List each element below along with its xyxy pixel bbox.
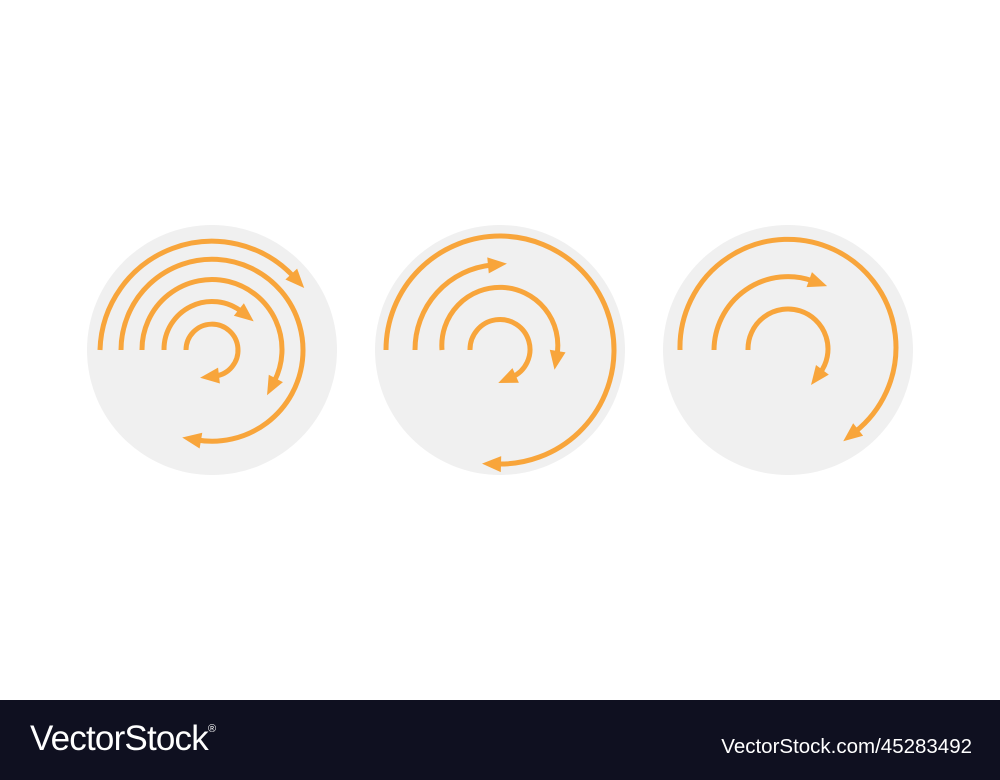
footer bar bbox=[0, 700, 1000, 780]
arrow: outer arc r108 bbox=[680, 239, 896, 432]
arrow: arc r58 bbox=[442, 287, 558, 355]
panel: circle 2 with four arrows bbox=[375, 225, 625, 475]
arrow: arc r48 bbox=[164, 301, 242, 350]
footer url: VectorStock.com/45283492 bbox=[721, 735, 972, 758]
footer logo: VectorStock® bbox=[30, 719, 215, 758]
arrow: outer arc r114 bbox=[386, 236, 614, 464]
arrow: outer arc r112 bbox=[100, 241, 294, 350]
arrow: arc r74 bbox=[714, 277, 813, 350]
arrow: arc r91 bbox=[121, 259, 303, 441]
arrow: arc r85 bbox=[415, 265, 492, 350]
panel: circle 3 with three arrows bbox=[663, 225, 913, 475]
arrow: arc r40 bbox=[748, 309, 828, 373]
arrow: arc r70 bbox=[142, 280, 282, 382]
panel: circle 1 with five arrows bbox=[87, 225, 337, 475]
arrow: arc r30 bbox=[470, 320, 530, 377]
arrow: arc r26 bbox=[186, 324, 238, 376]
